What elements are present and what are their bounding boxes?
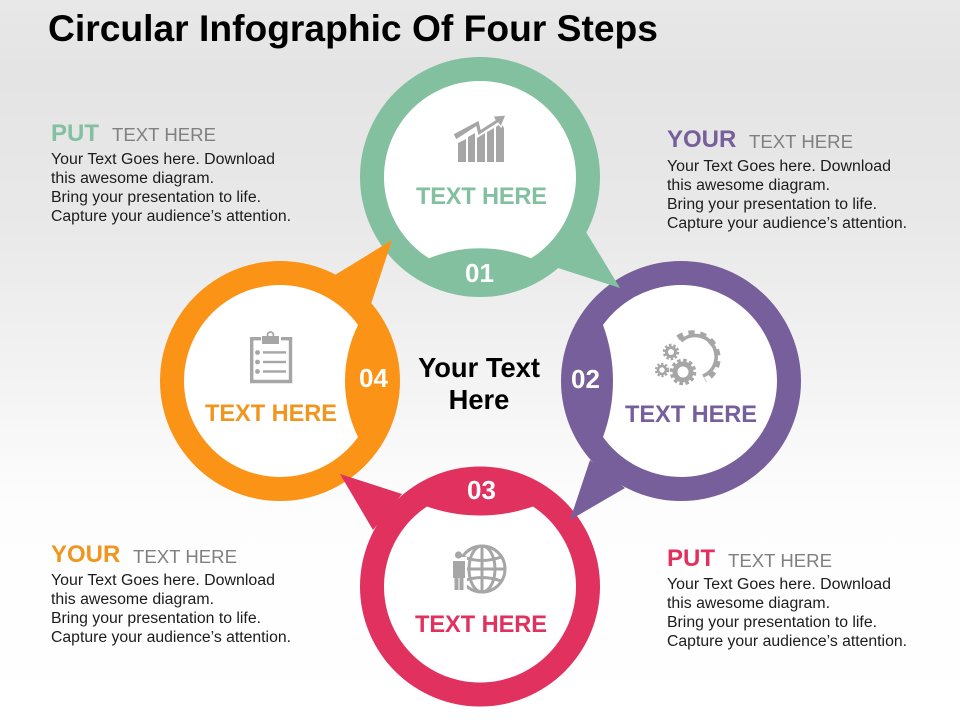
text block: top right: Capture your audience’s attention. [667,215,907,232]
text block: bottom left: this awesome diagram. [51,591,214,608]
text block: top left: Capture your audience’s attention. [51,208,291,225]
number 04: 04 [359,363,388,393]
number 02: 02 [571,364,600,394]
text block: top right: YOUR [667,126,736,153]
center text: Your Text [418,352,540,383]
pointer: step 04 tail [335,240,392,304]
text block: bottom left: Bring your presentation to life. [51,610,261,627]
panel: step 02 [561,261,801,501]
panel: step 04 [160,261,400,501]
text block: bottom left: YOUR [51,541,120,568]
icon: rising bar chart [453,115,506,162]
text block: top right: this awesome diagram. [667,177,830,194]
number 01: 01 [465,258,494,288]
text block: top left: PUT [51,120,99,147]
text block: bottom left: TEXT HERE [133,546,237,567]
text block: bottom right: TEXT HERE [728,550,832,571]
label: step 03: TEXT HERE [415,612,547,638]
panel: step 01 [360,57,600,297]
text block: top left: this awesome diagram. [51,170,214,187]
pointer: step 03 tail [340,474,402,530]
text block: bottom right: Bring your presentation to life. [667,614,877,631]
icon: clipboard checklist [252,332,290,382]
text block: top right [667,126,907,232]
panel: step 03 [360,466,600,706]
text block: bottom left: Your Text Goes here. Download [51,572,275,589]
text block: top left: TEXT HERE [112,124,216,145]
text block: top right: Bring your presentation to life. [667,196,877,213]
center text: Here [449,384,509,415]
text block: top left: Your Text Goes here. Download [51,151,275,168]
title: Circular Infographic Of Four Steps [48,7,658,49]
icon: person and globe [449,546,505,595]
text block: bottom right: PUT [667,545,715,572]
center text [418,352,540,415]
pointer: step 02 tail [570,460,625,520]
text block: bottom right: this awesome diagram. [667,595,830,612]
text block: top left: Bring your presentation to life. [51,189,261,206]
text block: top left [51,120,291,225]
number 03: 03 [467,475,496,505]
label: step 01: TEXT HERE [416,184,547,210]
text block: top right: TEXT HERE [749,131,853,152]
text block: top right: Your Text Goes here. Download [667,158,891,175]
label: step 02: TEXT HERE [625,402,757,428]
pointer: step 01 tail [558,232,620,288]
text block: bottom right: Your Text Goes here. Download [667,576,891,593]
icon: gears [656,333,718,384]
text block: bottom left [51,541,291,646]
label: step 04: TEXT HERE [205,401,337,427]
text block: bottom right: Capture your audience’s attention. [667,633,907,650]
text block: bottom left: Capture your audience’s attention. [51,629,291,646]
text block: bottom right [667,545,907,650]
